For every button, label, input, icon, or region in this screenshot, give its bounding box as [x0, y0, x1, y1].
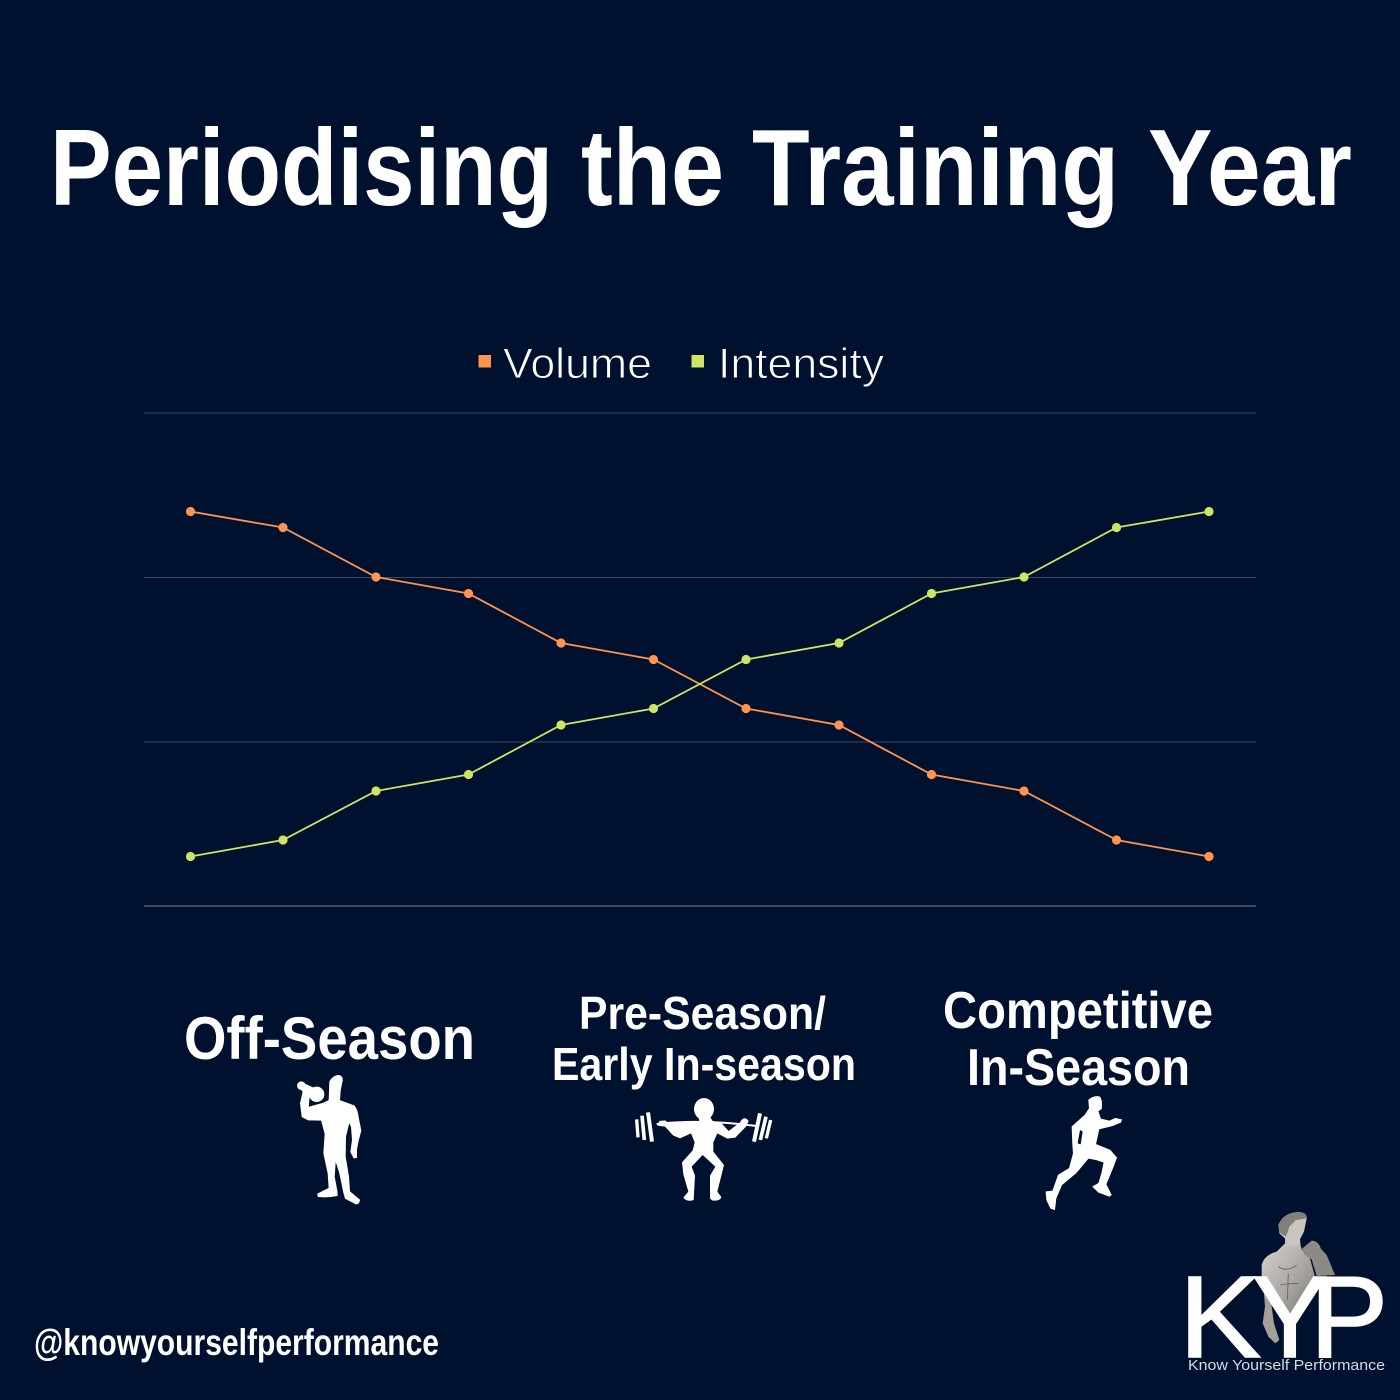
icon: runner: [1046, 1096, 1122, 1210]
heading: pre-season: [552, 987, 856, 1090]
title: Periodising: [50, 107, 553, 229]
logo letters: K: [1179, 1252, 1261, 1382]
heading: competitive in-season: [943, 982, 1213, 1097]
legend: intensity: Intensity: [718, 340, 885, 388]
heading: competitive in-season: In-Season: [967, 1039, 1190, 1097]
title: [50, 107, 1352, 229]
heading: competitive in-season: Competitive: [943, 982, 1213, 1040]
title: Training: [752, 107, 1119, 229]
heading: pre-season: Pre-Season/: [579, 987, 826, 1039]
series: intensity: [186, 507, 1214, 861]
logo letters: [1179, 1252, 1388, 1382]
series: volume: [186, 507, 1214, 861]
title: Year: [1148, 107, 1352, 229]
heading: pre-season: Early In-season: [552, 1038, 856, 1090]
line chart: [144, 413, 1256, 906]
logo: KYP: [1179, 1212, 1388, 1382]
legend: volume: Volume: [503, 340, 652, 388]
title: the: [581, 107, 724, 229]
chart legend: [478, 340, 885, 388]
icon: barbell squat: [637, 1098, 771, 1201]
logo tagline: Know Yourself Performance: [1188, 1358, 1385, 1374]
logo letters: Y: [1252, 1252, 1328, 1382]
icon: bodybuilder with dumbbell: [298, 1076, 361, 1204]
logo letters: P: [1310, 1252, 1388, 1382]
heading: off-season: Off-Season: [184, 1005, 475, 1072]
logo statue: [1262, 1212, 1335, 1343]
handle: @knowyourselfperformance: [34, 1322, 439, 1363]
